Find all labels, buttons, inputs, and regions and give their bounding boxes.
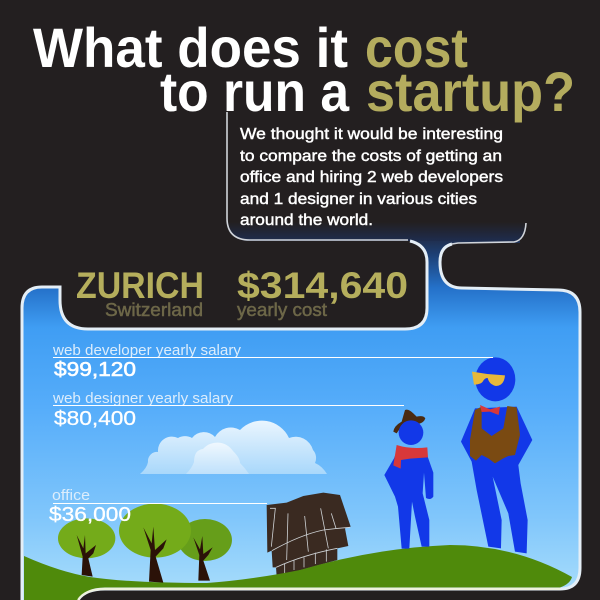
label: web designer salary: $80,400 bbox=[54, 408, 136, 430]
hill bbox=[24, 545, 572, 600]
tree: third bbox=[178, 519, 232, 581]
vest bbox=[470, 406, 520, 463]
label: web designer salary bbox=[52, 390, 404, 430]
bow tie bbox=[480, 405, 500, 415]
person: designer with hat and scarf bbox=[384, 410, 433, 549]
intro text block: We thought it would be interesting bbox=[240, 126, 503, 143]
yearly cost figure bbox=[237, 265, 408, 320]
head bbox=[399, 420, 423, 445]
yearly cost figure: yearly cost bbox=[237, 300, 327, 320]
label: office cost bbox=[49, 487, 267, 526]
intro text block: and 1 designer in various cities bbox=[240, 191, 477, 208]
panel outline: sky border bbox=[22, 241, 580, 600]
sunglasses bbox=[472, 372, 505, 386]
tree: centre bbox=[119, 504, 191, 583]
yearly cost figure: $314,640 bbox=[237, 265, 408, 306]
clouds bbox=[140, 421, 327, 474]
city heading: Zurich: ZURICH bbox=[76, 265, 204, 306]
panel: sky scene bbox=[22, 240, 580, 600]
tree: left bbox=[58, 518, 115, 577]
label: web developer salary bbox=[52, 342, 493, 381]
label: office cost: $36,000 bbox=[49, 504, 131, 526]
city heading: Zurich: Switzerland bbox=[105, 300, 203, 320]
hat bbox=[393, 410, 425, 433]
intro text block bbox=[240, 126, 503, 229]
intro text block: around the world. bbox=[240, 212, 373, 229]
label: web designer salary: web designer yearly salary bbox=[52, 390, 233, 407]
city heading: Zurich bbox=[76, 265, 204, 320]
intro text block: to compare the costs of getting an bbox=[240, 148, 502, 165]
figure body bbox=[461, 407, 532, 553]
scarf bbox=[393, 445, 428, 469]
person: developer with sunglasses and vest bbox=[461, 357, 532, 553]
head bbox=[475, 357, 515, 401]
title: cost bbox=[365, 16, 468, 79]
intro box outline bbox=[227, 112, 526, 244]
label: web developer salary: $99,120 bbox=[54, 359, 136, 381]
bottom dark tab border bbox=[78, 589, 560, 600]
label: office cost: office bbox=[52, 487, 90, 504]
title: to run a bbox=[160, 60, 350, 123]
figure body bbox=[384, 452, 433, 549]
label: web developer salary: web developer yearly salary bbox=[52, 342, 241, 359]
intro text block: office and hiring 2 web developers bbox=[240, 169, 503, 186]
title: startup? bbox=[366, 60, 575, 123]
title: What does it bbox=[33, 16, 348, 79]
panel: intro text box bbox=[228, 112, 526, 241]
building: office hut bbox=[267, 493, 351, 577]
title bbox=[33, 16, 575, 123]
